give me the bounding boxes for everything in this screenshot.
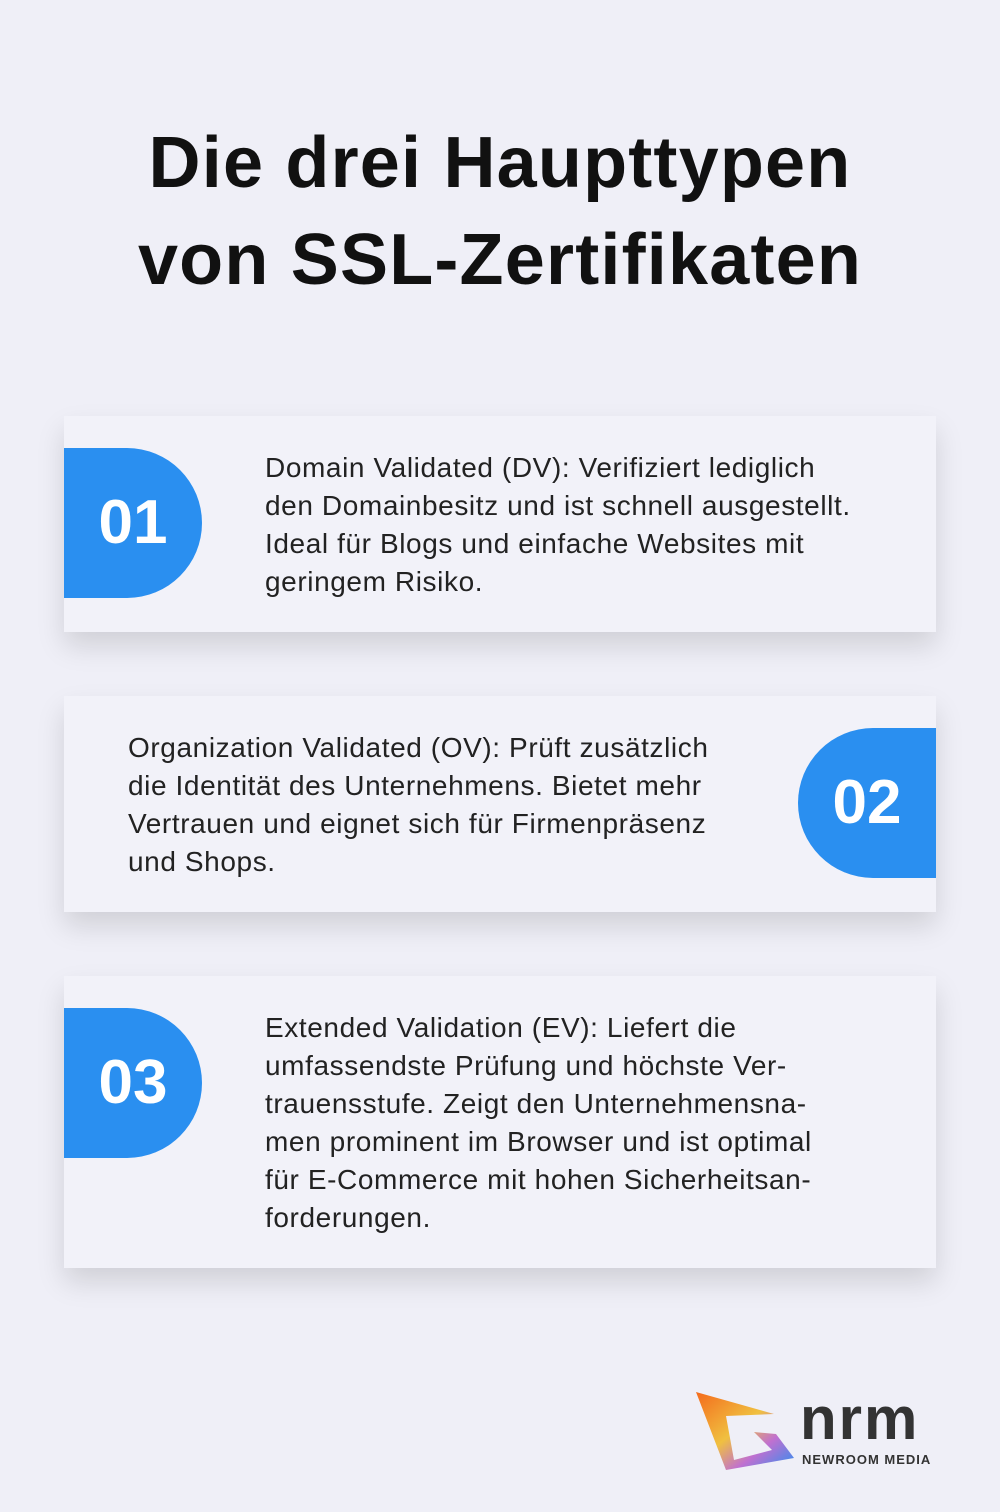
text 3: für E-Commerce mit hohen Sicherheitsan- [265,1164,811,1195]
text 3: umfassendste Prüfung und höchste Ver- [265,1050,787,1081]
text 3: forderungen. [265,1202,431,1233]
badge 01 [64,448,202,598]
card 1 [64,416,936,632]
text 1: Ideal für Blogs und einfache Websites mit [265,528,804,559]
title: Die drei Haupttypen [149,123,851,203]
logo: NEWROOM MEDIA [802,1452,931,1467]
text 1: Domain Validated (DV): Verifiziert lediglich [265,452,815,483]
text 1: geringem Risiko. [265,566,483,597]
badge 03: 03 [99,1048,167,1117]
logo [696,1385,931,1470]
card 3 [64,976,936,1268]
brand text: nrm [800,1385,919,1452]
badge 01: 01 [99,488,167,557]
badge 03 [64,1008,202,1158]
text 2: und Shops. [128,846,276,877]
text 3: trauensstufe. Zeigt den Unternehmensna- [265,1088,807,1119]
title: von SSL-Zertifikaten [138,220,862,300]
text 1 [265,452,851,597]
title [138,123,862,300]
text 2: Vertrauen und eignet sich für Firmenpräsenz [128,808,706,839]
text 2: Organization Validated (OV): Prüft zusätzlich [128,732,709,763]
text 3: men prominent im Browser und ist optimal [265,1126,812,1157]
badge 02 [798,728,936,878]
card 2 [64,696,936,912]
text 3 [265,1012,812,1233]
badge 02: 02 [833,768,901,837]
text 2: die Identität des Unternehmens. Bietet mehr [128,770,702,801]
text 3: Extended Validation (EV): Liefert die [265,1012,736,1043]
text 1: den Domainbesitz und ist schnell ausgestellt. [265,490,851,521]
text 2 [128,732,709,877]
icon: logo mark [696,1392,794,1470]
